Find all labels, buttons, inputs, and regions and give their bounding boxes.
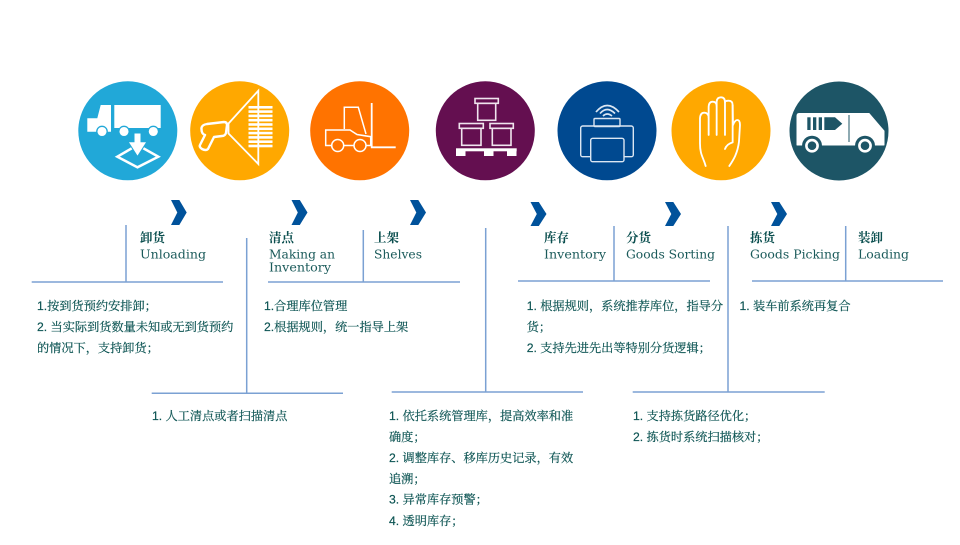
text block: sorting notes: 1. 根据规则，系统推荐库位，指导分 <box>527 298 723 313</box>
text block: shelves notes: 2.根据规则，统一指导上架 <box>264 319 408 334</box>
heading: making an inventory english: Making an <box>269 246 335 262</box>
text block: inventory notes: 4. 透明库存； <box>389 513 464 528</box>
text block: count notes: 1. 人工清点或者扫描清点 <box>152 408 288 423</box>
icon: stacked boxes on pallet <box>436 81 535 180</box>
panel: shelves step <box>264 230 460 334</box>
heading: making an inventory: 清点 <box>269 230 296 245</box>
text block: picking notes: 1. 支持拣货路径优化； <box>633 408 756 423</box>
panel: inventory step <box>389 228 606 528</box>
icon: delivery van <box>790 82 888 180</box>
text block: sorting notes: 2. 支持先进先出等特别分货逻辑； <box>527 340 711 355</box>
arrow: chevron 6 <box>771 202 787 226</box>
heading: shelves: 上架 <box>374 230 400 245</box>
arrow: chevron 5 <box>665 202 681 226</box>
heading: goods picking english: Goods Picking <box>750 246 840 262</box>
arrow: chevron 4 <box>530 202 546 226</box>
icon: wireless printer <box>558 81 656 180</box>
text block: picking notes: 2. 拣货时系统扫描核对； <box>633 429 768 444</box>
panel: inventory count step <box>152 230 343 423</box>
heading: goods sorting: 分货 <box>626 230 654 245</box>
heading: loading english: Loading <box>858 246 909 262</box>
heading: inventory: 库存 <box>544 230 569 245</box>
icon: barcode scanner <box>190 81 289 180</box>
panel: unloading step <box>32 225 233 355</box>
arrow: chevron 1 <box>171 200 187 225</box>
arrow: chevron 2 <box>292 200 308 225</box>
icon: unloading truck <box>78 81 177 180</box>
text block: inventory notes: 3. 异常库存预警； <box>389 492 488 506</box>
panel: goods sorting step <box>518 226 723 355</box>
icon: raised hand <box>672 81 770 180</box>
icon: forklift <box>310 81 409 180</box>
text block: unloading notes: 的情况下，支持卸货； <box>37 340 159 355</box>
text block: unloading notes: 2. 当实际到货数量未知或无到货预约 <box>37 319 233 334</box>
arrow: chevron 3 <box>410 200 426 225</box>
text block: inventory notes: 追溯； <box>389 472 426 486</box>
heading: loading: 装卸 <box>858 230 884 245</box>
heading: goods sorting english: Goods Sorting <box>626 246 715 262</box>
panel: goods picking step <box>633 226 840 444</box>
heading: goods picking: 拣货 <box>750 230 778 245</box>
heading: unloading: 卸货 <box>140 230 168 245</box>
heading: inventory english: Inventory <box>544 246 606 262</box>
text block: shelves notes: 1.合理库位管理 <box>264 298 347 313</box>
heading: shelves english: Shelves <box>374 246 422 262</box>
text block: inventory notes: 确度； <box>389 429 426 444</box>
heading: making an inventory english second line: Inventory <box>269 260 331 275</box>
text block: sorting notes: 货； <box>527 319 551 334</box>
heading: unloading english: Unloading <box>140 246 206 262</box>
text block: inventory notes: 2. 调整库存、移库历史记录，有效 <box>389 450 573 465</box>
panel: loading step <box>740 226 943 313</box>
text block: loading notes: 1. 装车前系统再复合 <box>740 298 851 313</box>
text block: inventory notes: 1. 依托系统管理库，提高效率和准 <box>389 408 573 423</box>
text block: unloading notes: 1.按到货预约安排卸； <box>37 298 157 313</box>
